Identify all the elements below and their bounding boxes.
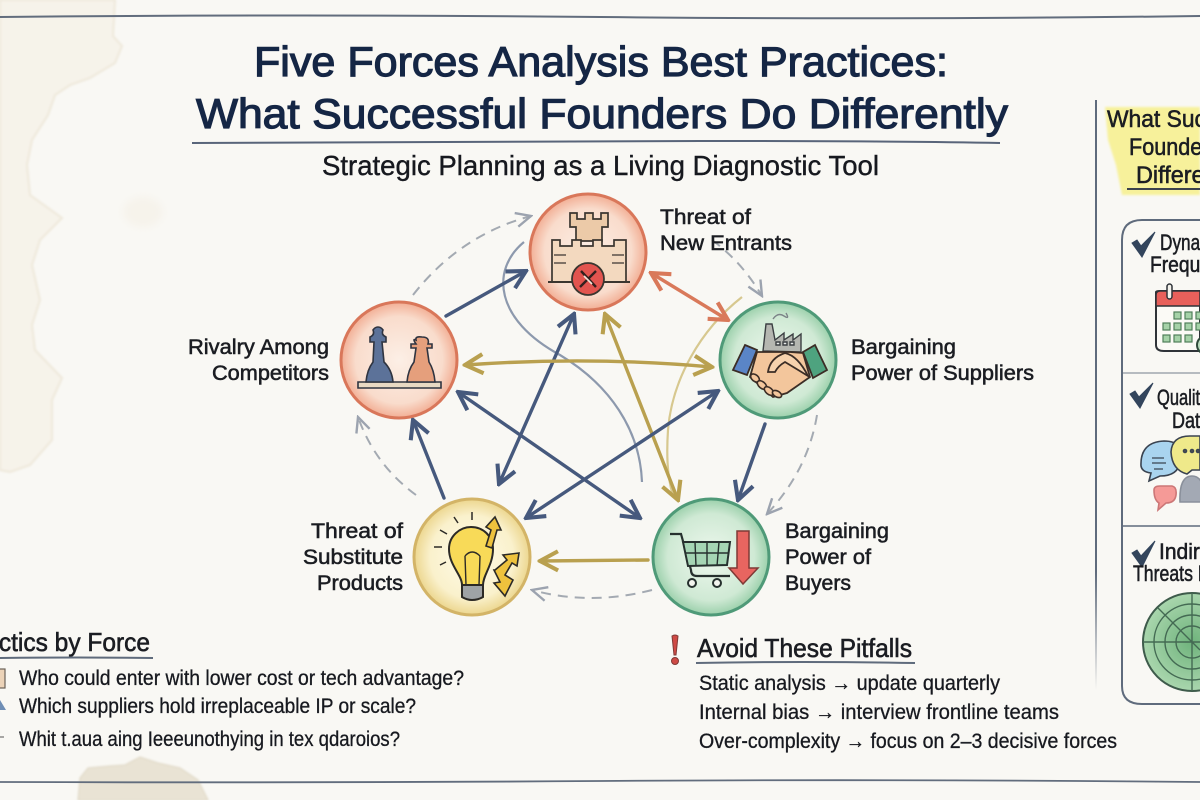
title underline: [192, 141, 1000, 143]
node label: substitutes: Threat of: [311, 520, 403, 543]
node label: buyers: Buyers: [785, 572, 851, 595]
title: Five Forces Analysis Best Practices:: [254, 38, 948, 85]
node: threat of substitute products: [414, 499, 530, 615]
sidebar highlight: [1105, 107, 1200, 195]
stain: bottom coffee mark: [78, 757, 208, 800]
node: rivalry among competitors: [341, 302, 457, 418]
node label: suppliers: Bargaining: [851, 336, 956, 359]
pitfalls heading: Avoid These Pitfalls: [697, 633, 912, 663]
node label: substitutes: Substitute: [303, 546, 403, 569]
icon: down arrow: [729, 531, 758, 584]
node: bargaining power of suppliers: [720, 302, 836, 418]
straight force arrows: [413, 271, 765, 561]
mini icon: tick: [0, 736, 4, 738]
stain: left edge watermark: [0, 0, 122, 472]
icon: change arrows: [486, 517, 519, 596]
panel: avoid these pitfalls: Internal bias → interview frontline teams: [699, 701, 1059, 724]
icon: shopping cart: [670, 534, 730, 587]
title: [196, 38, 1008, 137]
node label: buyers: [785, 520, 889, 595]
node label: substitutes: [303, 520, 403, 595]
bottom frame line: [0, 780, 1200, 782]
node: bargaining power of buyers: [653, 499, 769, 615]
node label: new entrants: Threat of: [660, 206, 751, 229]
card: indirect threats: [1132, 539, 1200, 691]
icon: check: [1130, 383, 1153, 408]
icon: chess pieces: [358, 327, 441, 388]
dashed outer cycle arrows: [358, 216, 817, 598]
icon: no-entry badge: [572, 263, 604, 295]
icon: exclamation: [672, 635, 678, 664]
top frame line: [0, 16, 1200, 18]
node label: rivalry: Competitors: [212, 362, 329, 385]
sidebar heading: [1107, 106, 1200, 189]
icon: check: [1132, 541, 1155, 567]
node label: suppliers: [851, 336, 1034, 385]
icon: light bulb: [434, 512, 493, 600]
curved connector arrows: [503, 242, 742, 495]
sidebar card: [1122, 220, 1200, 704]
card: dynamic frequency: [1132, 230, 1200, 354]
tactic questions: Who could enter with lower cost or tech advantage?: [19, 667, 464, 690]
node label: suppliers: Power of Suppliers: [851, 362, 1034, 385]
node label: substitutes: Products: [317, 572, 403, 595]
node label: new entrants: New Entrants: [660, 232, 792, 255]
icon: factory: [763, 313, 801, 352]
node label: rivalry: [188, 336, 329, 385]
icon: calendar: [1156, 284, 1200, 354]
panel: sidebar: [1095, 100, 1200, 704]
node label: new entrants: [660, 206, 792, 255]
panel: tactics by force: [0, 627, 464, 751]
panel: tactics by force: Which suppliers hold irreplaceable IP or scale?: [19, 695, 416, 718]
pitfalls list: Static analysis → update quarterly: [699, 672, 1000, 695]
mini icon: castle: [0, 669, 5, 688]
node: threat of new entrants: [530, 194, 646, 310]
panel: tactics by force: Whit t.aua aing Ieeeunothying in tex qdaroios?: [19, 728, 400, 751]
panel: avoid these pitfalls: [672, 633, 1117, 753]
icon: radar: [1143, 593, 1200, 691]
node label: buyers: Power of: [785, 546, 871, 569]
icon: handshake: [733, 345, 827, 399]
mini icon: handshake: [0, 700, 6, 710]
icon: castle: [548, 213, 630, 282]
stain: small faint spot: [123, 197, 163, 227]
icon: check: [1132, 232, 1155, 257]
title: What Successful Founders Do Differently: [196, 90, 1008, 137]
subtitle: Strategic Planning as a Living Diagnostic Tool: [322, 150, 879, 181]
node label: buyers: Bargaining: [785, 520, 889, 543]
node label: rivalry: Rivalry Among: [188, 336, 329, 359]
panel: avoid these pitfalls: Over-complexity → focus on 2–3 decisive forces: [699, 730, 1117, 753]
icon: speech bubbles: [1141, 436, 1200, 510]
card: qualitative data: [1130, 383, 1200, 510]
